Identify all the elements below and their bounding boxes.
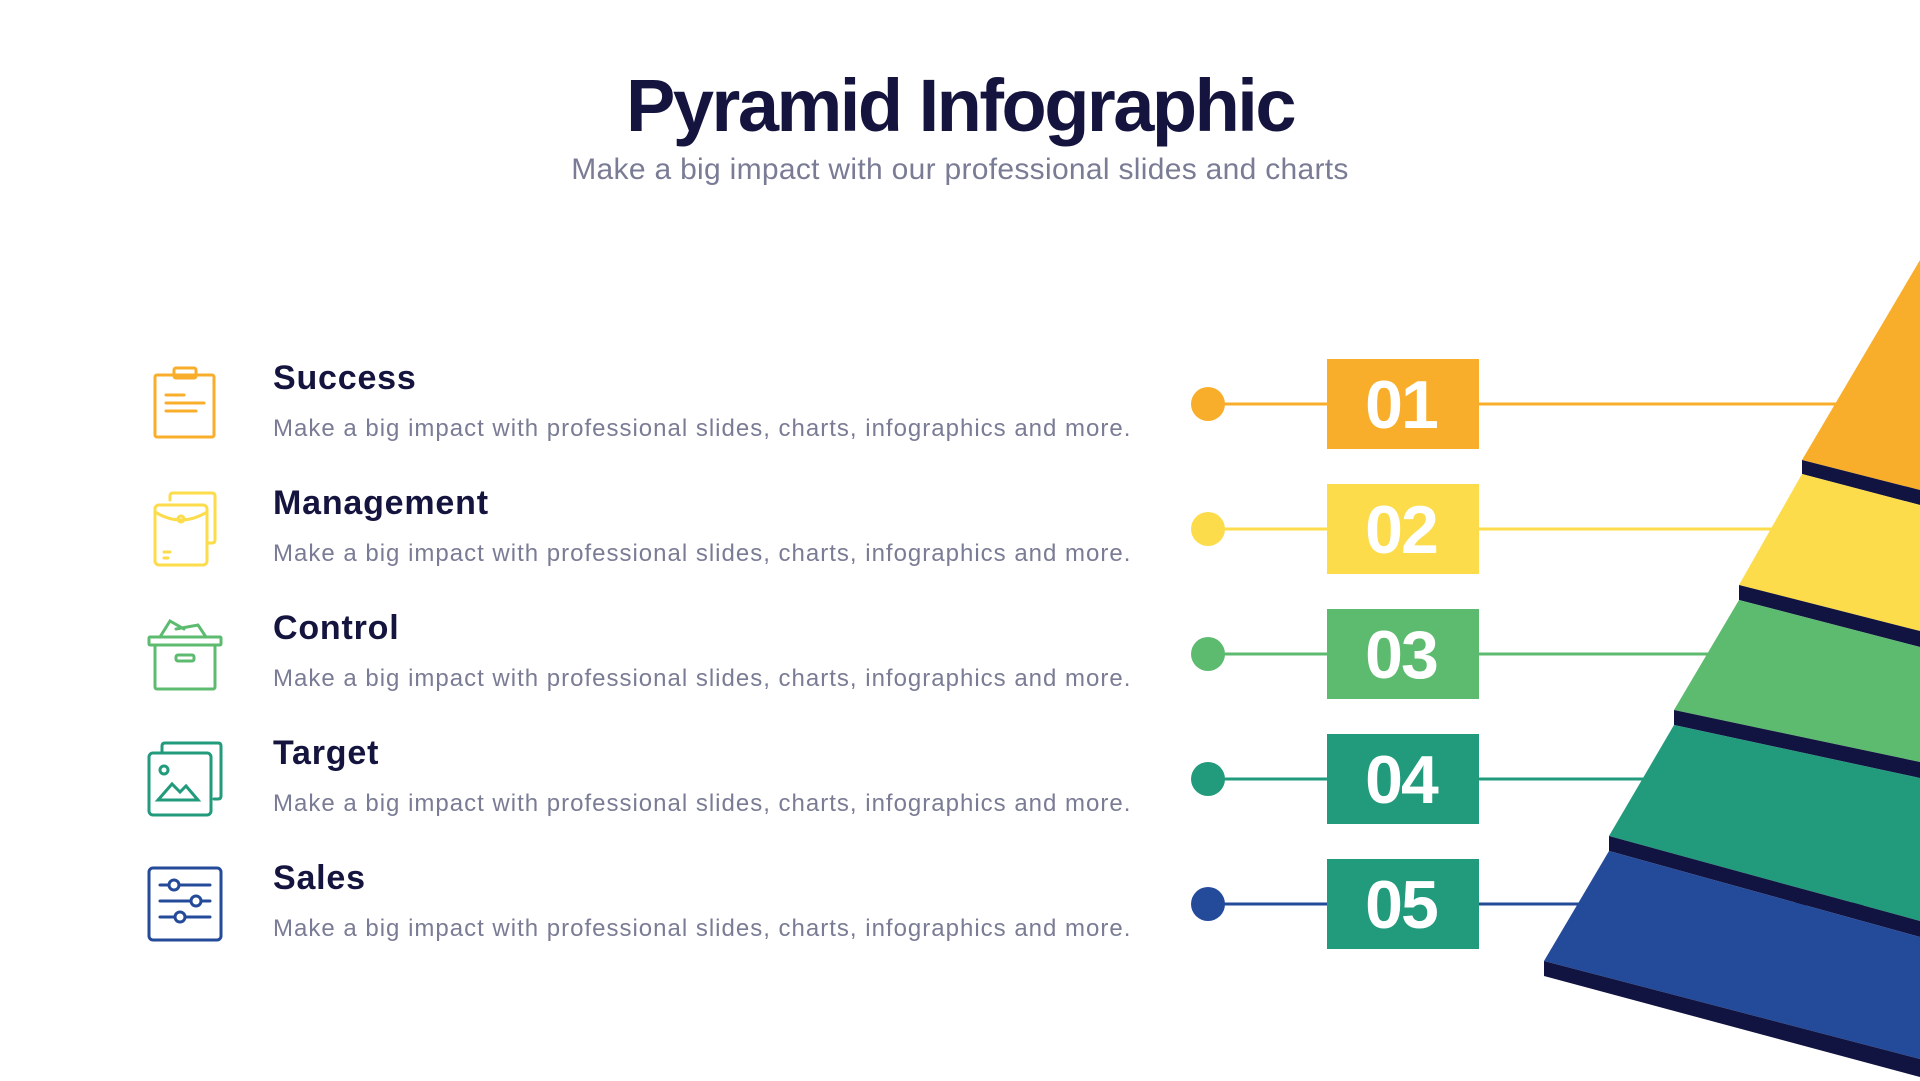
connector lines	[1208, 404, 1920, 904]
row 1 title: Success	[273, 359, 417, 397]
dots	[1191, 387, 1225, 921]
number boxes	[1327, 359, 1479, 949]
row 4 title: Target	[273, 734, 379, 772]
icon: image	[148, 742, 222, 816]
number boxes: 03	[1365, 617, 1437, 693]
icon: envelope folder	[153, 492, 216, 566]
icon: box	[148, 619, 222, 690]
row 5 description: Make a big impact with professional slides, charts, infographics and more.	[273, 915, 1131, 942]
number boxes: 01	[1365, 367, 1437, 443]
pyramid layers	[1544, 260, 1920, 1077]
number boxes: 02	[1365, 492, 1437, 568]
title: Pyramid Infographic	[626, 64, 1294, 147]
row 3 description: Make a big impact with professional slides, charts, infographics and more.	[273, 665, 1131, 692]
row 1 description: Make a big impact with professional slides, charts, infographics and more.	[273, 415, 1131, 442]
icon: clipboard	[154, 366, 216, 438]
subtitle: Make a big impact with our professional slides and charts	[571, 153, 1349, 186]
number boxes: 04	[1365, 742, 1439, 818]
number boxes: 05	[1365, 867, 1437, 943]
row 2 title: Management	[273, 484, 489, 522]
row 4 description: Make a big impact with professional slides, charts, infographics and more.	[273, 790, 1131, 817]
row 5 title: Sales	[273, 859, 366, 897]
row 2 description: Make a big impact with professional slides, charts, infographics and more.	[273, 540, 1131, 567]
row 3 title: Control	[273, 609, 399, 647]
icon: sliders	[148, 866, 222, 942]
